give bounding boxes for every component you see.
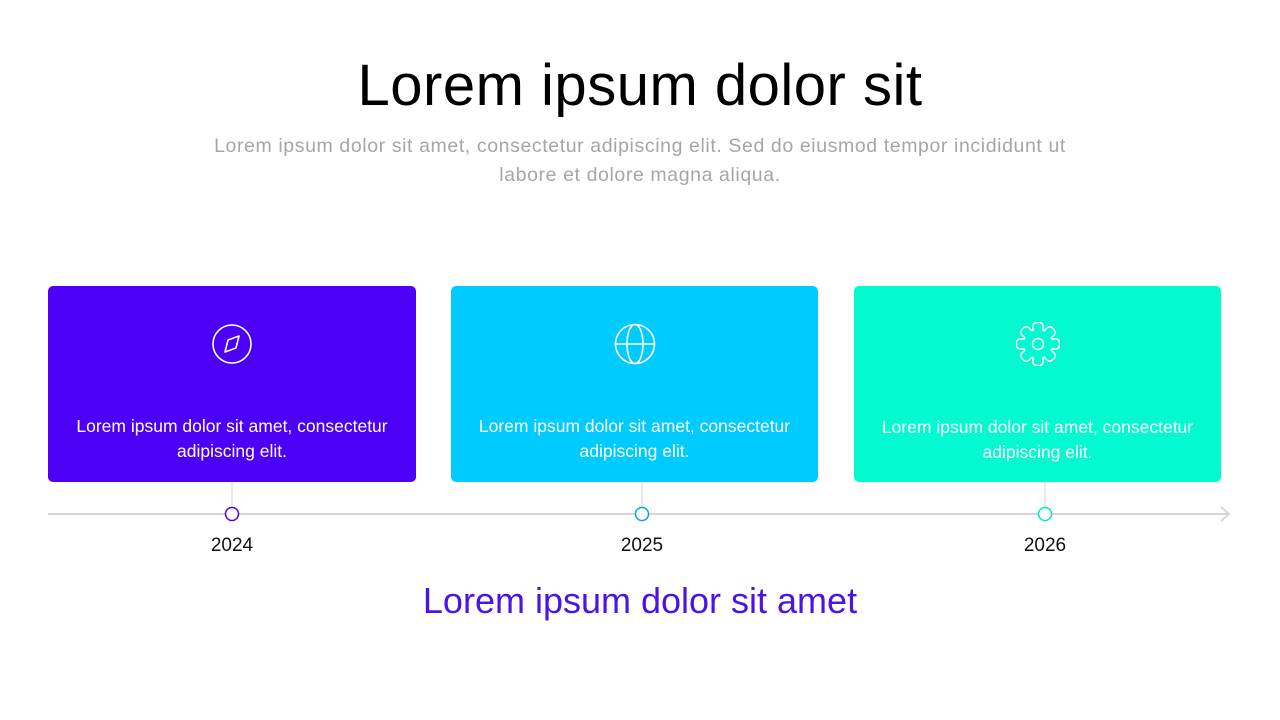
card 3 text: Lorem ipsum dolor sit amet, consectetur [882,417,1193,437]
card 3 text [882,417,1193,462]
icon: globe [614,324,656,364]
card 2 text [479,416,790,461]
card 1 text: adipiscing elit. [177,441,287,461]
marker 2024 [226,508,238,520]
subtitle: Lorem ipsum dolor sit amet, consectetur adipiscing elit. Sed do eiusmod tempor incididunt ut [214,135,1066,157]
subtitle [214,135,1066,186]
icon: compass [212,324,252,364]
marker 2025 [636,508,648,520]
year 2026: 2026 [1024,535,1066,556]
marker 2026 [1038,508,1052,520]
title: Lorem ipsum dolor sit [358,53,922,118]
card 3 text: adipiscing elit. [983,442,1092,462]
subtitle: labore et dolore magna aliqua. [499,164,781,186]
card 1 [48,286,416,482]
year 2025: 2025 [621,535,663,556]
year 2024: 2024 [211,535,253,556]
card 2 text: Lorem ipsum dolor sit amet, consectetur [479,416,790,436]
card 2 [451,286,818,482]
card 3 [854,286,1221,482]
footer caption: Lorem ipsum dolor sit amet [423,580,857,621]
icon: gear [1016,322,1060,366]
card 1 text [76,416,388,461]
card 2 text: adipiscing elit. [580,441,689,461]
timeline [48,482,1230,522]
card 1 text: Lorem ipsum dolor sit amet, consectetur [76,416,388,436]
